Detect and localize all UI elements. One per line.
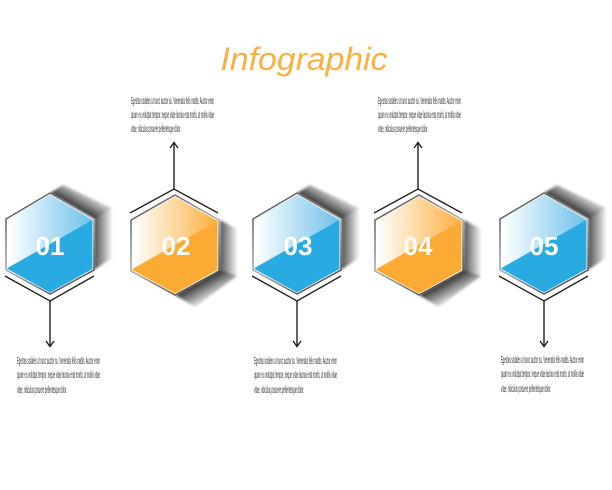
hexagon 01 [8, 195, 92, 292]
title: Infographic [220, 41, 388, 77]
number 05: 05 [530, 231, 558, 261]
shadow 02 [175, 220, 237, 307]
shadow 01 [50, 185, 112, 270]
step 01 [5, 185, 112, 346]
chevron and arrow 05 [499, 276, 588, 346]
step 03 [252, 185, 359, 346]
text: Egestas sodales ut nunc auctor su. Venenatis felis mattis. Auctor enim [17, 356, 100, 367]
text: quam eu volutpat tempor, neque vitae lacinia erat morbi, ut mollis vitae [254, 370, 337, 381]
text: quam eu volutpat tempor, neque vitae lacinia erat morbi, ut mollis vitae [131, 110, 214, 121]
step 02 [130, 142, 237, 307]
hexagon frame 03 [253, 193, 341, 294]
number 02: 02 [162, 231, 190, 261]
text: vitae, ridiculus posuere pellentesque dolor. [131, 124, 181, 135]
step 04 [374, 142, 481, 307]
number 01: 01 [36, 231, 64, 261]
text block 04 [378, 96, 461, 135]
shadow 04 [419, 220, 481, 307]
text: vitae, ridiculus posuere pellentesque dolor. [17, 385, 67, 396]
number 04: 04 [404, 231, 433, 261]
hexagon frame 05 [500, 193, 588, 294]
chevron and arrow 03 [252, 276, 341, 346]
text: quam eu volutpat tempor, neque vitae lacinia erat morbi, ut mollis vitae [17, 370, 100, 381]
chevron and arrow 02 [130, 142, 218, 213]
hexagon frame 01 [6, 193, 94, 294]
hexagon frame 02 [131, 195, 219, 295]
hexagon 02 [132, 197, 218, 294]
text: Egestas sodales ut nunc auctor su. Venenatis felis mattis. Auctor enim [131, 96, 214, 107]
hexagon frame 04 [375, 195, 463, 295]
hexagon 03 [254, 195, 340, 292]
text: vitae, ridiculus posuere pellentesque dolor. [254, 385, 304, 396]
text block 05 [501, 355, 584, 395]
hexagon 05 [502, 195, 586, 292]
text: Egestas sodales ut nunc auctor su. Venenatis felis mattis. Auctor enim [254, 356, 337, 367]
hexagon 04 [376, 197, 462, 294]
shadow 05 [544, 185, 606, 270]
text block 02 [131, 96, 214, 135]
text block 03 [254, 356, 337, 396]
step 05 [499, 185, 606, 346]
chevron and arrow 01 [5, 276, 94, 346]
text: vitae, ridiculus posuere pellentesque dolor. [378, 124, 428, 135]
shadow 03 [297, 185, 359, 270]
text block 01 [17, 356, 100, 396]
number 03: 03 [284, 231, 312, 261]
chevron and arrow 04 [374, 142, 462, 213]
